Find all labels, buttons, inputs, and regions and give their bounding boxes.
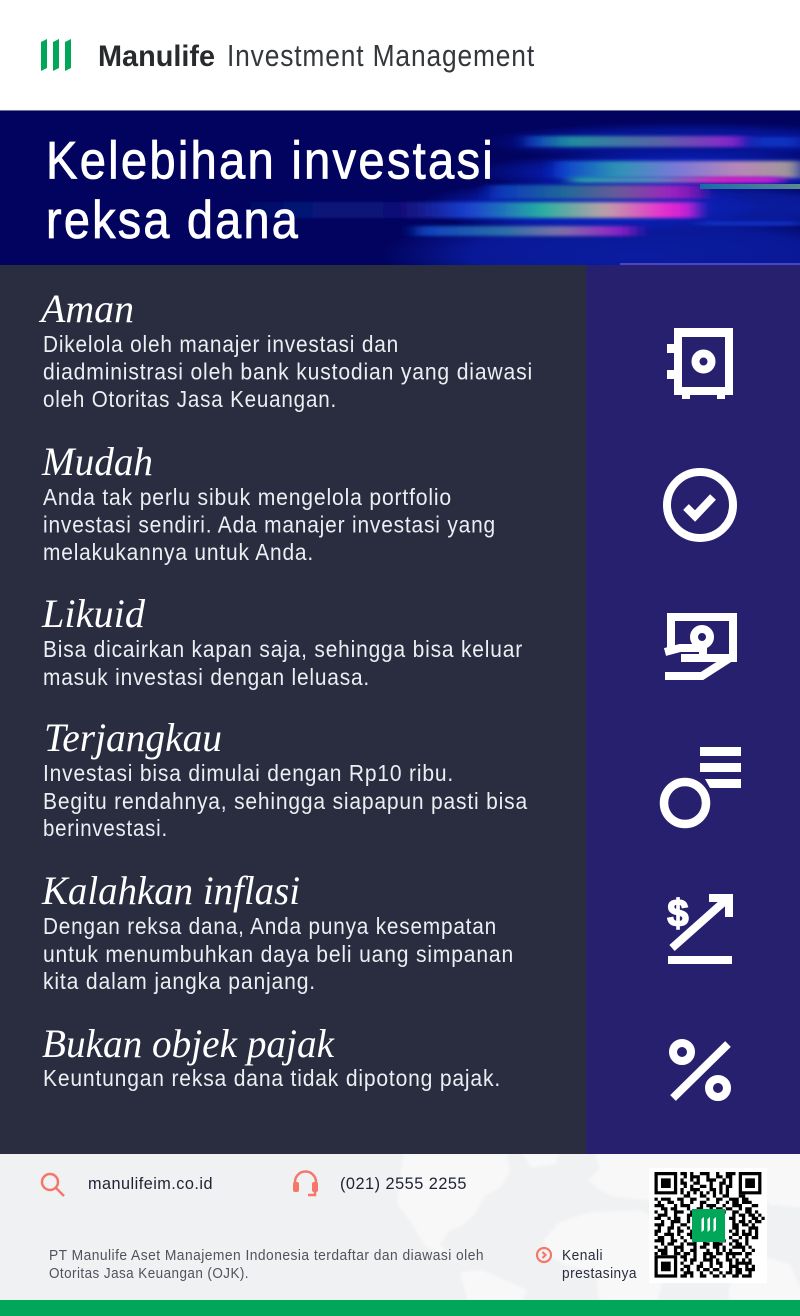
icon: dollar growth arrow	[667, 893, 733, 964]
item: Aman: Dikelola oleh manajer investasi dan	[43, 331, 399, 357]
item: Aman	[38, 286, 533, 412]
item: Kalahkan inflasi: Dengan reksa dana, Anda punya kesempatan	[43, 913, 497, 939]
item: Kalahkan inflasi: untuk menumbuhkan daya beli uang simpanan	[43, 941, 514, 967]
link: Kenali prestasinya: prestasinya	[562, 1265, 637, 1282]
item: Mudah	[41, 439, 496, 565]
page background	[0, 0, 800, 110]
item: Bukan objek pajak: Bukan objek pajak	[42, 1021, 335, 1066]
footer	[0, 1154, 800, 1300]
icon: search	[42, 1174, 64, 1196]
icon: arrow circle	[537, 1248, 551, 1262]
logo: Manulife Investment Management	[41, 38, 535, 73]
contact: website	[42, 1174, 213, 1196]
item: Mudah: Anda tak perlu sibuk mengelola portfolio	[43, 484, 452, 510]
regulatory note: Otoritas Jasa Keuangan (OJK).	[49, 1265, 249, 1282]
icon: check circle	[667, 472, 733, 538]
item: Bukan objek pajak	[42, 1021, 501, 1091]
item: Mudah: melakukannya untuk Anda.	[43, 539, 314, 565]
item: Mudah: investasi sendiri. Ada manajer investasi yang	[43, 512, 496, 538]
item: Likuid: Likuid	[41, 591, 146, 636]
QR code	[649, 1168, 767, 1283]
item: Terjangkau	[43, 715, 528, 841]
panel: benefits text	[0, 265, 586, 1154]
item: Terjangkau: Begitu rendahnya, sehingga siapapun pasti bisa	[43, 788, 528, 814]
icon: Manulife green bars	[41, 39, 71, 71]
title	[46, 132, 495, 250]
item: Kalahkan inflasi: kita dalam jangka panjang.	[43, 968, 316, 994]
icon: coin and bars	[664, 747, 741, 824]
world map background	[397, 1140, 800, 1310]
regulatory note	[49, 1247, 484, 1282]
QR centre logo	[692, 1209, 725, 1242]
icon: headset	[293, 1172, 318, 1195]
item: Kalahkan inflasi	[41, 868, 514, 994]
item: Terjangkau: Terjangkau	[44, 715, 222, 760]
banner light streaks	[250, 124, 800, 265]
item: Likuid	[41, 591, 523, 690]
item: Bukan objek pajak: Keuntungan reksa dana tidak dipotong pajak.	[43, 1065, 501, 1091]
green bottom bar	[0, 1300, 800, 1316]
title: reksa dana	[46, 191, 300, 250]
contact: website: manulifeim.co.id	[88, 1174, 213, 1193]
header banner	[0, 110, 800, 265]
item: Terjangkau: berinvestasi.	[43, 815, 168, 841]
item: Aman: Aman	[38, 286, 134, 331]
logo: Manulife Investment Management: Investment Management	[227, 38, 535, 73]
icon: dollar growth arrow: $	[667, 893, 689, 935]
link: Kenali prestasinya: Kenali	[562, 1247, 603, 1264]
item: Likuid: Bisa dicairkan kapan saja, sehingga bisa keluar	[43, 636, 523, 662]
icon: percent	[673, 1043, 728, 1098]
contact: phone: (021) 2555 2255	[340, 1174, 467, 1193]
item: Aman: diadministrasi oleh bank kustodian yang diawasi	[43, 358, 533, 384]
logo wordmark: Manulife	[98, 40, 215, 73]
panel: icons column	[586, 265, 800, 1154]
contact: phone	[293, 1172, 467, 1195]
icon: hand holding money	[665, 617, 733, 676]
item: Mudah: Mudah	[41, 439, 153, 484]
regulatory note: PT Manulife Aset Manajemen Indonesia terdaftar dan diawasi oleh	[49, 1247, 484, 1264]
item: Likuid: masuk investasi dengan leluasa.	[43, 664, 370, 690]
link: Kenali prestasinya	[537, 1247, 637, 1282]
item: Terjangkau: Investasi bisa dimulai dengan Rp10 ribu.	[43, 760, 454, 786]
title: Kelebihan investasi	[46, 132, 495, 190]
item: Kalahkan inflasi: Kalahkan inflasi	[41, 868, 300, 913]
item: Aman: oleh Otoritas Jasa Keuangan.	[43, 386, 337, 412]
icon: safe	[667, 328, 733, 399]
